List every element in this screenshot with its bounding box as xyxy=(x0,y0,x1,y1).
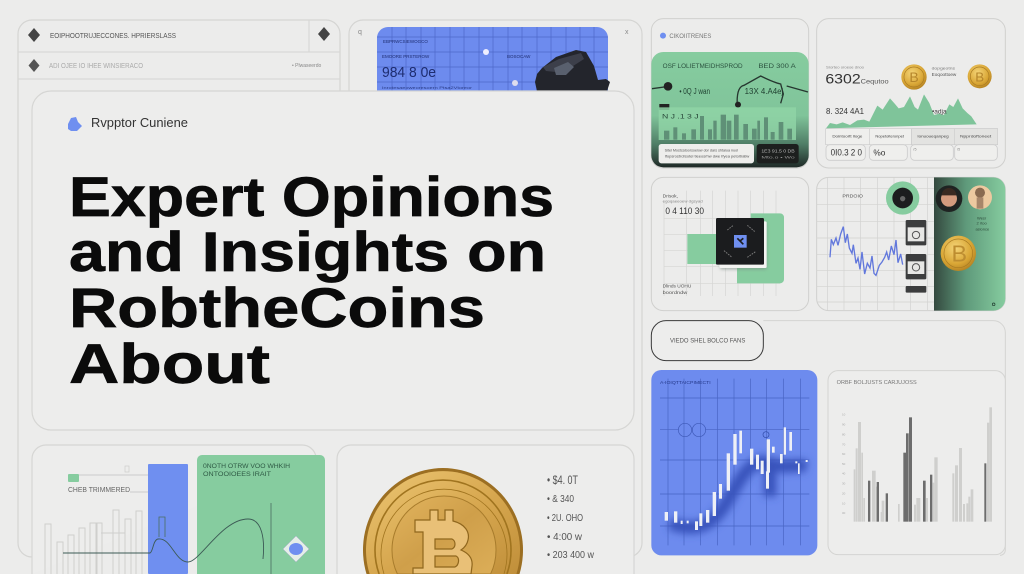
grey bar chart: 50 xyxy=(842,462,846,466)
icon: coin one: B xyxy=(909,69,919,85)
side text: 2 rtoo xyxy=(977,221,988,226)
icon: green ring xyxy=(886,181,919,215)
grey bar chart: 80 xyxy=(842,432,846,436)
grey bar chart: 90 xyxy=(842,422,846,426)
green card text: 0NOTH OTRW VOO WHKIH xyxy=(203,463,290,470)
small caption: Srorteo oroeoe dnoo xyxy=(826,66,864,70)
logo xyxy=(68,115,188,131)
panel: main title card xyxy=(32,91,634,430)
small gear mark xyxy=(992,303,995,306)
pill button: VIEDO SHEL BOLCO FANS xyxy=(670,338,745,345)
value list: • 2U. OHO xyxy=(547,512,583,524)
value list: • 4:00 w xyxy=(547,531,582,543)
panel: market green card: Sitel Mostcatoorsoeiow dor dars shtaiua nuol xyxy=(665,147,738,152)
white caption xyxy=(659,144,754,163)
side label: dopgeotns xyxy=(932,66,955,70)
panel: price and coins: Eoqoottoew xyxy=(932,72,957,77)
blue bar xyxy=(148,464,188,574)
value list: • & 340 xyxy=(547,493,574,505)
side text: Wesr xyxy=(977,215,987,220)
blue chart card: EMOORE PRSTEROW xyxy=(382,54,430,59)
blue chart card: EBPRWCSIEWOGCO xyxy=(383,39,428,44)
second row note: • Plwaseerdo xyxy=(292,63,321,69)
line curve xyxy=(63,519,264,562)
figure two: 8. 324 4A1 xyxy=(826,107,865,116)
label block: Drisok, xyxy=(663,193,678,198)
panel: top-left list xyxy=(18,20,340,557)
first row label: EOIPHOOTRUJECCONES. HPRIERSLASS xyxy=(50,31,176,40)
label block: 0 4 110 30 xyxy=(665,206,704,216)
legend label: CHEB TRIMMERED xyxy=(68,487,130,494)
icon: person one xyxy=(936,185,962,212)
grey bar chart: 00 xyxy=(842,511,846,515)
close mark: x xyxy=(625,29,629,36)
green card text xyxy=(203,463,290,478)
wires xyxy=(652,76,808,107)
grey bar chart: 10 xyxy=(842,501,846,505)
grey bar chart: 30 xyxy=(842,482,846,486)
icon: black chip xyxy=(716,218,767,269)
label block: egoqaeeoew dgsyad xyxy=(663,200,703,204)
stats table: %o xyxy=(873,147,886,157)
value list: • 203 400 w xyxy=(547,549,594,561)
title: RobtheCoins xyxy=(69,276,485,339)
icon: side coin: B xyxy=(952,241,967,267)
panel: bottom-left charts xyxy=(32,445,325,574)
icon: large gold coin xyxy=(363,468,523,574)
inner bar chart: N J .1 3 J xyxy=(662,114,699,121)
icon: coin one xyxy=(901,64,927,90)
panel: price and coins: Cequtoo xyxy=(861,78,889,85)
stats table: i5 xyxy=(957,148,960,152)
area chart xyxy=(826,94,977,128)
icon: coin two: B xyxy=(975,69,984,84)
icon: logo mark xyxy=(68,117,82,131)
icon: diamond two xyxy=(318,27,330,41)
panel: line chart and people xyxy=(817,177,1005,311)
stats table: r5 xyxy=(913,148,917,152)
value list xyxy=(547,473,594,561)
card heading: OSF LOLIETMEIDHSPROD xyxy=(663,64,743,70)
blue chart card: Inrotesaeoweoresoern Ptsa2Vtoreor xyxy=(382,85,473,90)
blue chart card: BOSOCAW xyxy=(507,54,531,59)
label block: Dlinds UOHU xyxy=(663,283,692,289)
panel: price and coins xyxy=(817,19,1005,168)
icon: side coin xyxy=(941,236,976,271)
panel: bitcoin coin xyxy=(337,445,634,574)
icon: black device xyxy=(535,50,610,96)
grey bar chart: ORBF BOLJUSTS CARJUJOSS xyxy=(837,380,917,386)
panel: QR device grid xyxy=(651,177,809,311)
blue chart card xyxy=(377,27,608,103)
green blocks xyxy=(687,213,784,283)
grey bar chart xyxy=(828,371,1005,555)
green gradient card xyxy=(651,52,809,167)
grey bar chart: 60 xyxy=(842,452,846,456)
panel: market green card: • 0Q J wan xyxy=(679,87,710,96)
panel label: CIKOIITRENES xyxy=(669,33,711,40)
blue candlestick chart xyxy=(651,370,817,555)
label block xyxy=(663,193,704,296)
panel: market green card: BED 300 A xyxy=(758,64,796,70)
side text xyxy=(975,215,990,232)
green card text: ONTOOIOEES IRAIT xyxy=(203,471,271,478)
grey bar chart: 10 xyxy=(842,413,846,417)
icon: person two xyxy=(968,185,992,209)
panel: market green card: Mto.o • Wo xyxy=(761,156,795,160)
icon: diamond three xyxy=(28,59,40,72)
blue candlestick chart: A-IOIQTTAICPIMECTI xyxy=(660,380,711,386)
green card xyxy=(197,455,325,574)
blue chart card: 984 8 0e xyxy=(382,64,436,81)
stats table xyxy=(826,129,998,160)
panel: top-centre device card xyxy=(349,20,642,556)
green side panel xyxy=(934,177,1005,311)
stats table: Nopetoiteronpet xyxy=(875,135,904,139)
pill button xyxy=(651,321,763,361)
icon: blue dot xyxy=(660,33,666,39)
dark caption xyxy=(757,144,799,163)
blue line chart xyxy=(830,227,903,275)
small pin mark: q xyxy=(358,29,362,36)
grey bar chart: 70 xyxy=(842,442,846,446)
second row label: ADI OJEE IO IHEE WINSIERACO xyxy=(49,61,143,70)
stats table: 0I0.3 2 0 xyxy=(831,147,862,157)
price figure: 6302 xyxy=(825,70,861,86)
grey bar chart: 40 xyxy=(842,472,846,476)
side text: asionce xyxy=(975,227,990,232)
panel: market green card: 13X 4.A4ej xyxy=(745,87,784,96)
title xyxy=(69,165,554,395)
panel: market green card xyxy=(651,19,809,168)
inner bar chart xyxy=(659,107,796,140)
panel: lower right container xyxy=(651,321,1005,555)
stats table: Npprdoftoneet xyxy=(960,135,991,139)
grey bar chart: 20 xyxy=(842,491,846,495)
value list: • $4. 0T xyxy=(547,473,578,487)
icon: dark tiles xyxy=(906,220,926,293)
stats table: Dointoortt lloge xyxy=(832,135,862,139)
title: Expert Opinions xyxy=(69,165,554,228)
panel: market green card: Ifopsrostrdrsotel tieeosrhw dwe Ifyea petoitratiw xyxy=(665,153,749,158)
icon: diamond one xyxy=(28,28,40,42)
legend swatch xyxy=(68,474,79,482)
icon: coin two xyxy=(968,64,992,88)
title: About xyxy=(69,332,270,395)
title: and Insights on xyxy=(69,220,546,283)
panel: price and coins: •adja xyxy=(932,109,947,115)
icon: diamond dot xyxy=(283,536,309,562)
brand name: Rvpptor Cuniene xyxy=(91,115,188,130)
chart label: PRDOIO xyxy=(842,193,864,198)
stats table: Ionuoueqanpeg xyxy=(917,135,949,139)
label block: boordndw xyxy=(663,290,688,296)
panel: market green card: 1E3 91.5 0 DB xyxy=(761,149,795,154)
outline bars xyxy=(45,510,142,574)
